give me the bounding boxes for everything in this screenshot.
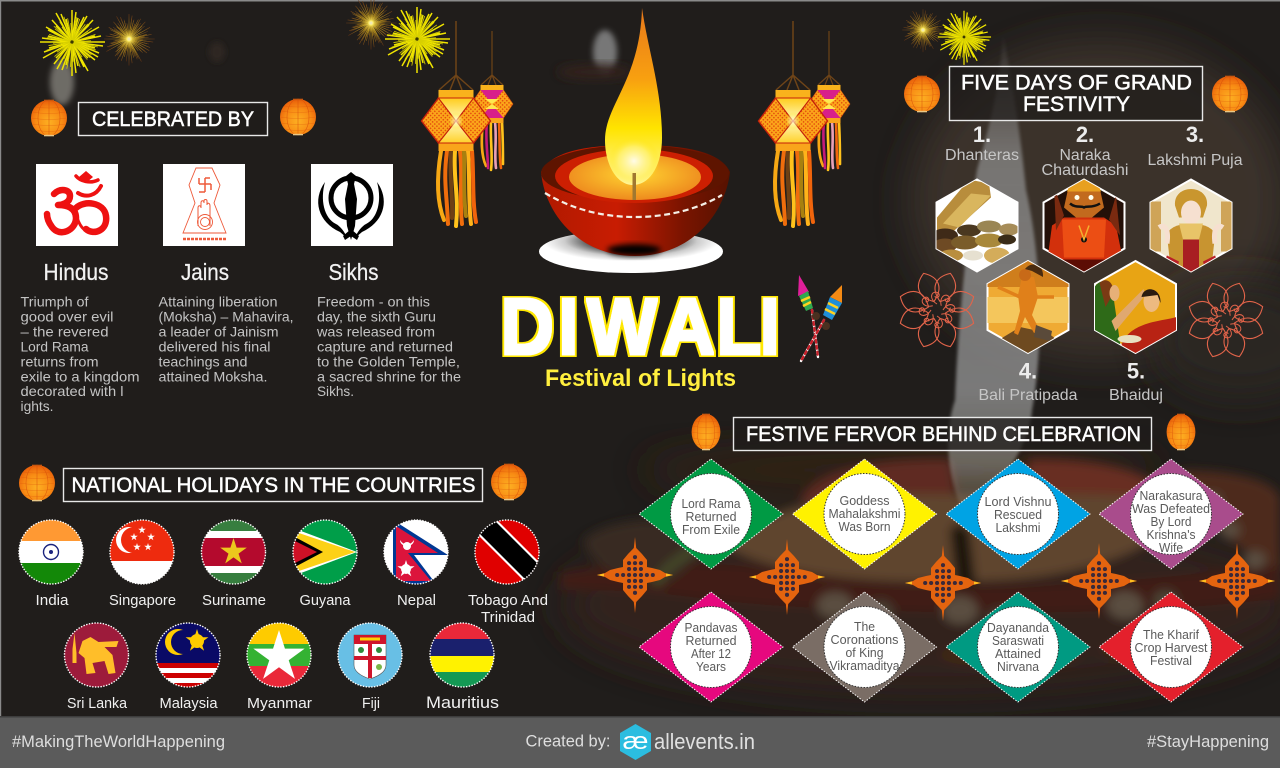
diamond: Dayananda Saraswati: Attained <box>995 646 1041 661</box>
wick <box>632 173 636 200</box>
description: Hindus: – the revered <box>20 324 109 340</box>
heading: national holidays <box>64 468 482 502</box>
country labels: Mauritius <box>426 693 499 712</box>
diya lamp <box>539 8 730 273</box>
lantern <box>280 99 316 135</box>
label: Jains: Jains <box>181 259 229 285</box>
description: Hindus: decorated with l <box>20 383 124 399</box>
diamond: Lord Rama: From Exile <box>682 522 740 537</box>
description: Jains <box>158 294 294 384</box>
heading: five days: FESTIVITY <box>1023 93 1130 116</box>
label: Hindus <box>20 259 140 414</box>
hanging lanterns: left pair <box>422 21 513 226</box>
flag: Mauritius <box>430 623 494 687</box>
title: Diwali: DIWALI <box>500 283 780 372</box>
description: Sikhs <box>316 294 461 399</box>
day 3: Lakshmi Puja <box>1148 122 1243 272</box>
flag: Nepal <box>384 520 448 584</box>
diamond: Kharif harvest: The Kharif <box>1143 627 1199 642</box>
icon: jain symbol <box>163 164 245 246</box>
hexagon image: Narakasura <box>1043 180 1125 274</box>
logo: allevents.in: allevents.in <box>654 729 755 754</box>
ornaments <box>597 537 1275 621</box>
day 1: Dhanteras: 1. <box>973 122 991 147</box>
diamond: Goddess Mahalakshmi <box>792 459 936 569</box>
description: Sikhs: day, the sixth Guru <box>317 308 436 324</box>
country labels: Suriname <box>202 592 266 609</box>
day 2: Naraka Chaturdashi: Chaturdashi <box>1042 162 1128 179</box>
diamond: Coronations of King Vikramaditya: of King <box>846 645 884 660</box>
heading: festive fervor <box>734 418 1152 450</box>
flag: Suriname <box>202 520 266 584</box>
description: Sikhs: capture and returned <box>317 338 453 354</box>
flag: Malaysia <box>156 623 220 687</box>
icon: rangoli right <box>1186 280 1266 360</box>
country labels: Myanmar <box>247 695 312 712</box>
diamond: Narakasura <box>1099 459 1243 569</box>
subtitle: Festival of Lights <box>545 365 736 392</box>
heading: five days: FIVE DAYS OF GRAND <box>961 72 1192 94</box>
description: Hindus: good over evil <box>20 308 113 324</box>
day 2: Naraka Chaturdashi: Naraka <box>1060 147 1111 164</box>
heading: celebrated by <box>78 102 268 136</box>
candle beam <box>948 35 1040 545</box>
day 4: Bali Pratipada: Bali Pratipada <box>978 387 1078 404</box>
description: Hindus: ights. <box>20 398 54 414</box>
description: Hindus <box>20 294 140 414</box>
diamond: Pandavas: Returned <box>686 633 736 648</box>
heading: celebrated by: CELEBRATED BY <box>92 108 254 131</box>
lantern <box>904 76 940 112</box>
label: Sikhs: Sikhs <box>328 259 378 285</box>
hanging lanterns: right pair <box>758 21 850 226</box>
day 5: Bhaiduj: Bhaiduj <box>1109 387 1163 404</box>
description: Sikhs: Freedom - on this <box>317 294 430 310</box>
day 2: Naraka Chaturdashi <box>1042 122 1128 274</box>
panel: celebrated by <box>20 99 461 414</box>
description: Sikhs: was released from <box>316 324 435 340</box>
diamond: Narakasura: Krishna's <box>1146 527 1196 542</box>
description: Hindus: returns from <box>20 354 98 370</box>
heading: festive fervor: FESTIVE FERVOR BEHIND CELEBRATION <box>746 423 1141 446</box>
diamond: Kharif harvest: Festival <box>1150 653 1192 668</box>
diamond: Lord Rama: Lord Rama <box>682 496 741 511</box>
diamond: Lord Vishnu: Lord Vishnu <box>984 494 1052 509</box>
hashtag right: #StayHappening <box>1147 732 1269 751</box>
diamond: Coronations of King Vikramaditya <box>792 592 936 702</box>
diamond: Dayananda Saraswati: Dayananda <box>987 620 1050 635</box>
fireworks: top right <box>902 9 991 65</box>
created by: Created by: <box>526 732 610 750</box>
description: Hindus: exile to a kingdom <box>20 368 140 384</box>
lantern <box>491 464 527 500</box>
diamond: Lord Vishnu: Lakshmi <box>996 520 1041 535</box>
description: Jains: teachings and <box>158 354 248 370</box>
day 5: Bhaiduj <box>1094 261 1176 404</box>
day 4: Bali Pratipada <box>978 261 1078 404</box>
diamond: Lord Rama: Returned <box>686 509 736 524</box>
hexagon image: Vamana on Bali <box>987 261 1069 353</box>
hexagon image: brother and sister <box>1094 261 1176 353</box>
flag: Guyana <box>293 520 357 584</box>
panel: festive fervor <box>597 414 1275 702</box>
day 3: Lakshmi Puja: Lakshmi Puja <box>1148 152 1243 169</box>
diamond: Pandavas: Pandavas <box>684 620 738 635</box>
lantern <box>692 414 720 450</box>
label: Jains <box>158 259 294 384</box>
diamond: Dayananda Saraswati: Nirvana <box>997 659 1040 674</box>
diamond: Coronations of King Vikramaditya: The <box>854 619 875 634</box>
country labels: Malaysia <box>160 695 218 712</box>
country labels: Trinidad <box>481 609 535 626</box>
icon: crossed rockets <box>798 275 842 361</box>
country labels: Sri Lanka <box>67 695 128 712</box>
footer <box>0 716 1280 768</box>
diamond: Goddess Mahalakshmi: Mahalakshmi <box>828 506 901 521</box>
blurred photo of clay lamp <box>560 446 1280 695</box>
icon: khanda <box>311 164 393 246</box>
description: Hindus: Triumph of <box>20 294 89 310</box>
diamond: Lord Vishnu: Rescued <box>994 507 1042 522</box>
country labels: Fiji <box>362 695 380 712</box>
flag: Singapore <box>110 520 174 584</box>
diamond: Narakasura: Was Defeated <box>1132 501 1210 516</box>
day 1: Dhanteras: Dhanteras <box>945 147 1019 164</box>
day 5: Bhaiduj: 5. <box>1127 358 1145 384</box>
description: Jains: Attaining liberation <box>158 294 278 310</box>
description: Hindus: Lord Rama <box>20 338 89 354</box>
diamond: Dayananda Saraswati: Saraswati <box>992 633 1044 648</box>
diamond: Goddess Mahalakshmi: Was Born <box>838 519 890 534</box>
diamond: Kharif harvest: Crop Harvest <box>1134 640 1208 655</box>
fireworks: top left <box>40 10 155 76</box>
diamond: Narakasura: Narakasura <box>1140 488 1203 503</box>
diamond: Narakasura: Wife <box>1159 540 1183 555</box>
day 3: Lakshmi Puja: 3. <box>1186 122 1204 147</box>
diamond: Coronations of King Vikramaditya: Coronations <box>830 632 899 647</box>
day 1: Dhanteras <box>932 122 1019 272</box>
description: Jains: delivered his final <box>158 338 270 354</box>
hexagon image: Lakshmi <box>1150 180 1232 272</box>
diamond: Pandavas <box>639 592 783 702</box>
diamond: Pandavas: After 12 <box>691 646 731 661</box>
flag: Myanmar <box>247 623 311 687</box>
diamond: Lord Rama <box>639 459 783 569</box>
diamond: Lord Vishnu <box>946 459 1090 569</box>
flame <box>605 8 662 185</box>
diamond: Pandavas: Years <box>696 659 726 674</box>
lantern <box>31 100 67 136</box>
panel: five days of grand festivity <box>897 66 1266 404</box>
logo: allevents.in: æ <box>622 728 648 755</box>
label: Sikhs <box>316 259 461 399</box>
diamond: Goddess Mahalakshmi: Goddess <box>840 493 890 508</box>
icon: rangoli left <box>897 270 977 350</box>
lantern <box>1212 76 1248 112</box>
flag: India <box>19 520 83 584</box>
diamond: Kharif harvest <box>1099 592 1243 702</box>
lantern <box>1167 414 1195 450</box>
plate <box>539 230 723 273</box>
day 2: Naraka Chaturdashi: 2. <box>1076 122 1094 147</box>
bowl <box>541 145 730 256</box>
country labels: Nepal <box>397 592 436 609</box>
diamond: Coronations of King Vikramaditya: Vikramaditya <box>830 658 900 673</box>
lantern <box>19 465 55 501</box>
panel: national holidays <box>19 464 561 712</box>
country labels: Singapore <box>109 592 176 609</box>
country labels: India <box>36 592 69 609</box>
description: Sikhs: a sacred shrine for the <box>317 368 461 384</box>
day 4: Bali Pratipada: 4. <box>1019 358 1037 384</box>
description: Jains: attained Moksha. <box>158 368 268 384</box>
hashtag left: #MakingTheWorldHappening <box>12 732 225 751</box>
description: Jains: a leader of Jainism <box>158 324 278 340</box>
description: Sikhs: Sikhs. <box>317 383 354 399</box>
country labels <box>36 592 548 712</box>
fireworks: top centre <box>346 0 450 73</box>
country labels: Tobago And <box>468 592 548 609</box>
heading: five days <box>950 66 1202 120</box>
diamond: Narakasura: By Lord <box>1150 514 1192 529</box>
diamond: Dayananda Saraswati <box>946 592 1090 702</box>
country labels: Guyana <box>300 592 351 609</box>
label: Hindus: Hindus <box>44 259 108 285</box>
icon: om <box>36 164 118 246</box>
description: Jains: (Moksha) – Mahavira, <box>158 308 294 324</box>
heading: national holidays: NATIONAL HOLIDAYS IN THE COUNTRIES <box>72 474 476 497</box>
flag: Fiji <box>338 623 402 687</box>
logo: allevents.in <box>620 724 755 760</box>
flag: Trinidad and Tobago <box>474 519 540 585</box>
flag: Sri Lanka <box>64 623 128 687</box>
hexagon image: gold coins <box>932 180 1019 272</box>
description: Sikhs: to the Golden Temple, <box>317 354 460 370</box>
